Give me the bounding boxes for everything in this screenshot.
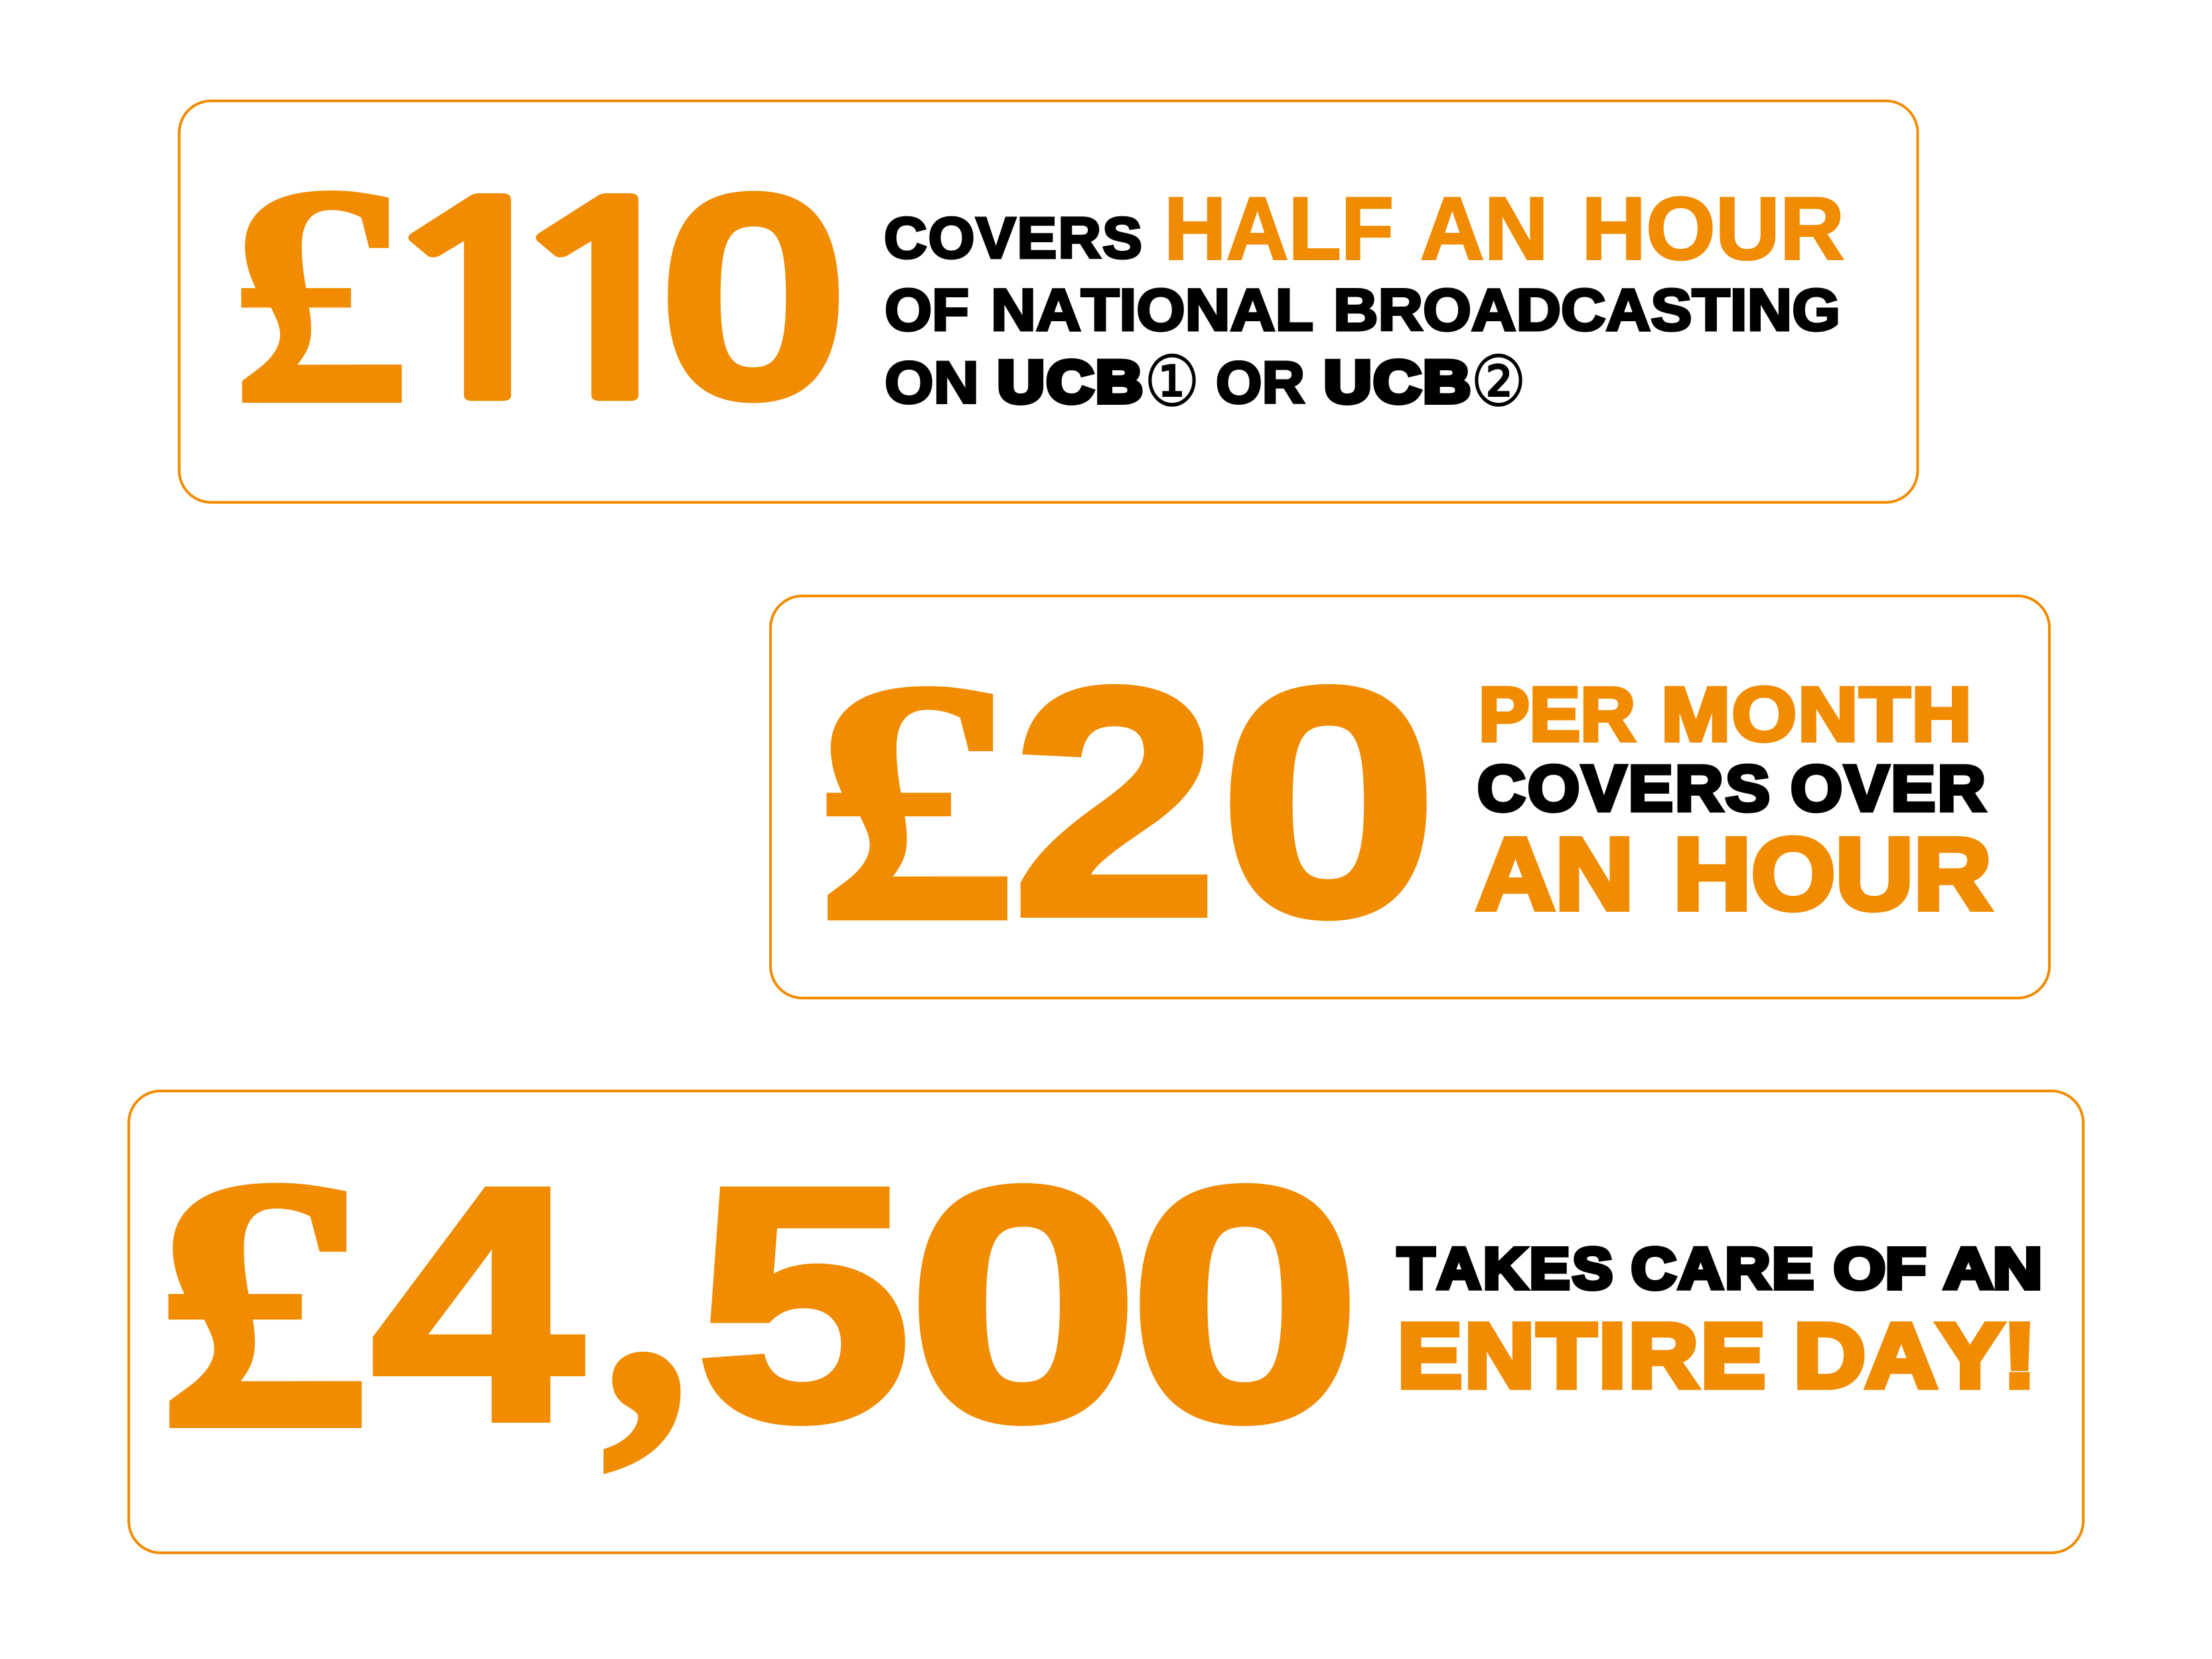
amount: £110: 1 — [362, 173, 596, 439]
amount: £4,500: 5 — [696, 1118, 911, 1489]
description: per month covers over an hour: HOUR — [1673, 817, 1992, 931]
logo: UCB 2: ② — [1471, 341, 1526, 422]
description: covers half an hour of national broadcasting — [884, 179, 1844, 422]
description: covers half an hour of national broadcasting: NATIONAL — [991, 276, 1313, 342]
description: covers half an hour of national broadcasting: AN — [1420, 179, 1548, 279]
panel: £4,500 entire day — [129, 1077, 2083, 1553]
description: takes care of an entire day — [1398, 1237, 2042, 1407]
description: per month covers over an hour — [1476, 672, 1992, 931]
description: covers half an hour of national broadcasting: HALF — [1164, 179, 1394, 279]
description: takes care of an entire day: AN — [1944, 1237, 2042, 1301]
description: takes care of an entire day: OF — [1834, 1237, 1926, 1301]
amount: £110: 1 — [489, 173, 723, 439]
amount: £20: £ — [814, 611, 1016, 992]
amount: £4,500: 0 — [907, 1118, 1140, 1489]
description: covers half an hour of national broadcasting: OF — [885, 276, 969, 342]
amount: £20: 2 — [1011, 620, 1218, 983]
amount: £4,500: 4 — [372, 1118, 585, 1489]
logo: UCB 1: UCB — [997, 348, 1145, 415]
description: per month covers over an hour: MONTH — [1661, 672, 1973, 757]
panel border — [771, 596, 2049, 998]
amount: £20: 0 — [1218, 620, 1439, 983]
panel: £20 per month — [771, 596, 2049, 998]
amount: £110 — [229, 121, 851, 469]
logo: UCB 2: UCB — [1324, 348, 1473, 415]
panel border — [179, 101, 1918, 502]
description: per month covers over an hour: COVERS — [1477, 753, 1772, 824]
description: takes care of an entire day: ENTIRE — [1398, 1305, 1768, 1407]
description: per month covers over an hour: PER — [1479, 672, 1635, 757]
amount: £4,500: 0 — [1128, 1118, 1362, 1489]
description: covers half an hour of national broadcasting: BROADCASTING — [1333, 276, 1840, 342]
description: covers half an hour of national broadcasting: OR — [1216, 349, 1305, 415]
description: takes care of an entire day: TAKES — [1398, 1237, 1615, 1301]
logo: UCB 2 — [1324, 341, 1526, 422]
description: covers half an hour of national broadcasting: ON — [885, 349, 979, 415]
logo: UCB 1 — [997, 341, 1200, 422]
amount: £20 — [814, 611, 1439, 992]
amount: £4,500 — [156, 1077, 1362, 1502]
description: per month covers over an hour: AN — [1476, 817, 1634, 931]
description: per month covers over an hour: OVER — [1791, 753, 1988, 824]
logo: UCB 1: ① — [1144, 341, 1200, 422]
description: takes care of an entire day: DAY! — [1794, 1305, 2036, 1407]
panel: £110 half an hour — [179, 101, 1918, 502]
amount: £110: £ — [229, 121, 411, 469]
amount: £4,500: , — [603, 1077, 690, 1492]
description: takes care of an entire day: CARE — [1631, 1237, 1816, 1301]
description: covers half an hour of national broadcasting: HOUR — [1582, 179, 1844, 279]
amount: £4,500: £ — [156, 1105, 370, 1502]
amount: £110: 0 — [656, 132, 851, 461]
panel border — [129, 1091, 2083, 1553]
description: covers half an hour of national broadcasting: COVERS — [884, 206, 1143, 271]
